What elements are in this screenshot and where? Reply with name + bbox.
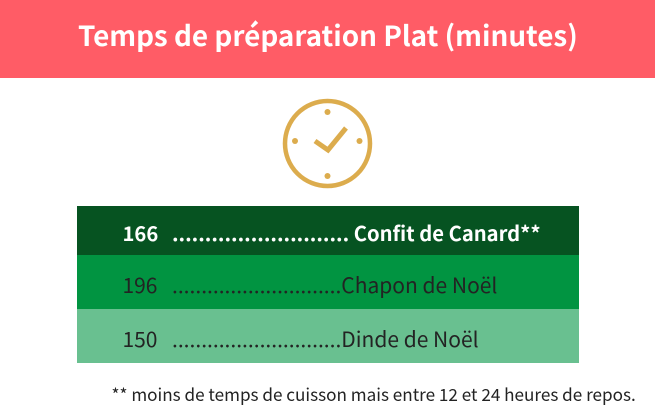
row: Chapon de Noël xyxy=(77,255,579,309)
row: Confit de Canard: 166 xyxy=(122,218,158,247)
title banner xyxy=(0,0,655,78)
footnote: ** moins de temps de cuisson mais entre 12 et 24 heures de repos. xyxy=(112,381,636,406)
title: Temps de préparation Plat (minutes) xyxy=(78,15,578,55)
row: Dinde de Noël: .............................Dinde de Noël xyxy=(172,324,479,354)
table of preparation times xyxy=(77,206,579,363)
row: Dinde de Noël: 150 xyxy=(122,324,157,354)
row: Confit de Canard: ........................... Confit de Canard** xyxy=(172,218,541,247)
icon: clock xyxy=(282,98,372,188)
row: Dinde de Noël xyxy=(77,309,579,363)
row: Confit de Canard xyxy=(77,206,579,255)
row: Chapon de Noël: 196 xyxy=(122,270,157,300)
row: Chapon de Noël: .............................Chapon de Noël xyxy=(172,270,497,300)
